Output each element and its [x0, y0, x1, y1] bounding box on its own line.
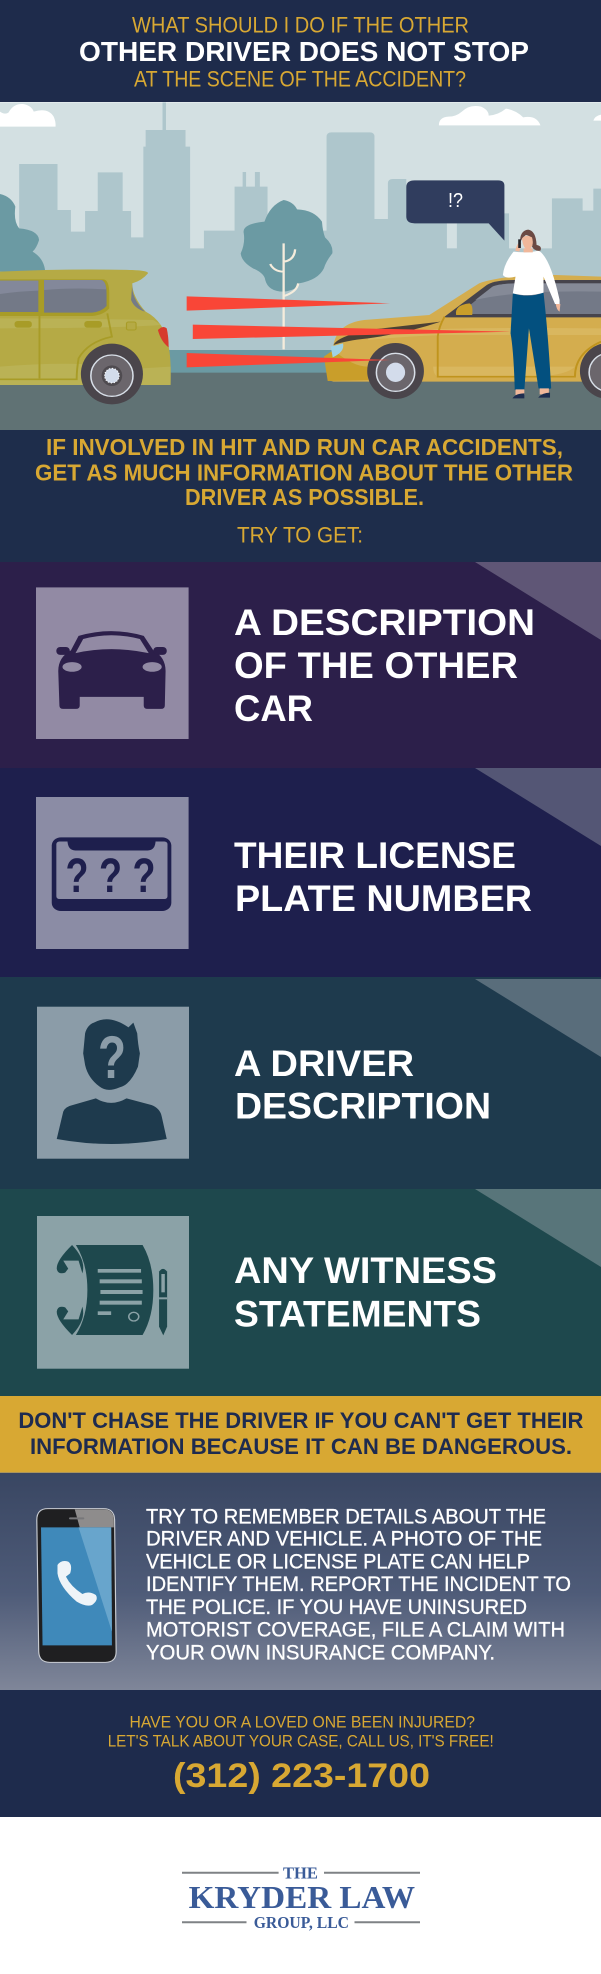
warning line 1: DON'T CHASE THE DRIVER IF YOU CAN'T GET THEIR [18, 1408, 584, 1433]
panel: witness statements [0, 1189, 601, 1396]
panel: remember details [0, 1473, 601, 1690]
title line 2: OTHER DRIVER DOES NOT STOP [79, 36, 529, 67]
speech bubble text: !? [448, 190, 463, 212]
paragraph: VEHICLE OR LICENSE PLATE CAN HELP [146, 1550, 530, 1573]
paragraph: IDENTIFY THEM. REPORT THE INCIDENT TO [146, 1573, 571, 1596]
icon: license plate: ? [66, 850, 88, 903]
icon: license plate: ? [99, 850, 122, 903]
illustration: hit and run scene [0, 102, 601, 431]
left car [0, 269, 171, 404]
cta line 2: LET'S TALK ABOUT YOUR CASE, CALL US, IT'S FREE! [108, 1732, 494, 1751]
panel: driver description [0, 977, 601, 1189]
heading: a description of the other car: A DESCRIPTION [234, 601, 535, 643]
paragraph: YOUR OWN INSURANCE COMPANY. [146, 1641, 495, 1664]
logo: The Kryder Law Group, LLC: THE [283, 1864, 318, 1883]
icon: car [56, 631, 167, 709]
panel: license plate number [0, 768, 601, 979]
title line 1: WHAT SHOULD I DO IF THE OTHER [132, 12, 469, 37]
heading: any witness statements [234, 1249, 497, 1334]
icon: scroll and pen [57, 1245, 167, 1335]
call to action [0, 1690, 601, 1817]
paragraph [146, 1505, 571, 1664]
paragraph: MOTORIST COVERAGE, FILE A CLAIM WITH [146, 1619, 565, 1642]
heading: a driver description: A DRIVER [234, 1042, 414, 1084]
title header [0, 0, 601, 102]
icon: unknown person [57, 1019, 167, 1144]
try to get: TRY TO GET: [237, 523, 363, 548]
road [0, 373, 601, 431]
icon: smartphone [37, 1509, 116, 1662]
heading: their license plate number [234, 834, 532, 919]
paragraph: THE POLICE. IF YOU HAVE UNINSURED [146, 1596, 527, 1619]
intro section [0, 430, 601, 562]
phone number: (312) 223-1700 [173, 1757, 430, 1795]
heading: their license plate number: THEIR LICENSE [234, 834, 516, 876]
icon: license plate [52, 837, 171, 911]
paragraph: TRY TO REMEMBER DETAILS ABOUT THE [146, 1505, 546, 1528]
intro line 1: IF INVOLVED IN HIT AND RUN CAR ACCIDENTS, [46, 434, 563, 460]
panel: description of the other car [0, 562, 601, 768]
motion streaks [187, 296, 511, 367]
heading: any witness statements: ANY WITNESS [234, 1249, 497, 1291]
warning banner [0, 1396, 601, 1473]
right car [324, 275, 601, 399]
intro line 3: DRIVER AS POSSIBLE. [185, 484, 424, 510]
title line 3: AT THE SCENE OF THE ACCIDENT? [134, 67, 466, 92]
intro line 2: GET AS MUCH INFORMATION ABOUT THE OTHER [35, 459, 573, 485]
heading: their license plate number: PLATE NUMBER [235, 877, 532, 919]
heading: a driver description [234, 1042, 491, 1127]
warning line 2: INFORMATION BECAUSE IT CAN BE DANGEROUS. [30, 1434, 572, 1459]
heading: a driver description: DESCRIPTION [235, 1085, 491, 1127]
left wheel [81, 344, 143, 404]
woman on phone [503, 230, 560, 398]
logo: The Kryder Law Group, LLC: GROUP, LLC [254, 1913, 349, 1932]
heading: any witness statements: STATEMENTS [234, 1292, 481, 1334]
heading: a description of the other car [234, 601, 535, 729]
heading: a description of the other car: OF THE OTHER [234, 644, 518, 686]
logo: The Kryder Law Group, LLC [182, 1864, 420, 1932]
icon: license plate: ? [132, 850, 156, 903]
clouds [0, 104, 601, 127]
logo: The Kryder Law Group, LLC: KRYDER LAW [189, 1879, 415, 1915]
paragraph: DRIVER AND VEHICLE. A PHOTO OF THE [146, 1528, 542, 1551]
city skyline [0, 102, 601, 373]
trees [0, 194, 332, 349]
speech bubble [406, 180, 504, 241]
heading: a description of the other car: CAR [234, 687, 313, 729]
right rear wheel [580, 343, 601, 399]
right front wheel [367, 343, 424, 399]
icon: unknown person: ? [98, 1024, 126, 1091]
cta line 1: HAVE YOU OR A LOVED ONE BEEN INJURED? [130, 1713, 475, 1732]
